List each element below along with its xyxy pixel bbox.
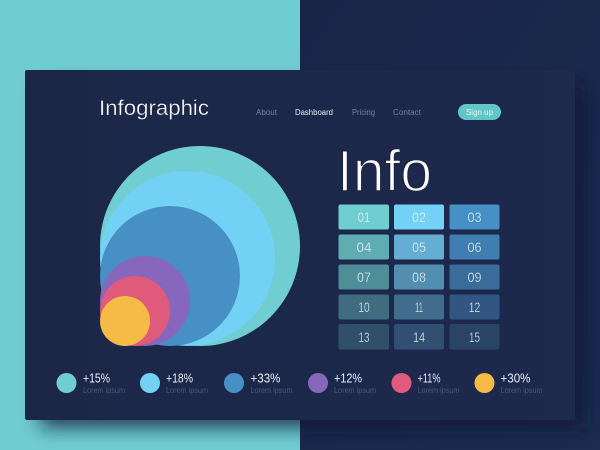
tile grid: 04 (356, 239, 372, 255)
tile grid (338, 204, 500, 350)
navigation menu: Dashboard (295, 108, 333, 117)
legend item 2: +18% (166, 372, 193, 386)
legend item 3 (224, 372, 293, 395)
tile grid: 10 (358, 299, 370, 315)
tile grid: 03 (468, 209, 482, 225)
legend item 6 (474, 372, 543, 395)
legend item 4: Lorem ipsum (334, 386, 376, 395)
legend item 5 (392, 372, 460, 395)
sign up button: Sign up (466, 108, 494, 117)
card shadow (40, 84, 585, 428)
tile grid: 15 (469, 329, 480, 345)
tile grid: 11 (415, 299, 423, 315)
title: Infographic (99, 96, 209, 120)
main card (25, 70, 575, 420)
navigation menu: About (256, 108, 278, 117)
tile grid: 01 (358, 209, 370, 225)
legend item 1 (56, 372, 125, 395)
legend item 5: Lorem ipsum (418, 386, 460, 395)
legend item 1: +15% (83, 372, 110, 386)
legend item 2: Lorem ipsum (166, 386, 208, 395)
nested circle chart (100, 146, 300, 346)
legend item 3: Lorem ipsum (250, 386, 293, 395)
tile grid: 08 (412, 269, 426, 285)
legend item 2 (140, 372, 208, 395)
tile grid: 02 (412, 209, 426, 225)
sign up button (458, 104, 501, 120)
tile grid: 07 (357, 269, 371, 285)
legend item 4: +12% (334, 372, 362, 386)
tile grid: 12 (469, 299, 480, 315)
legend item 6: Lorem ipsum (500, 386, 543, 395)
background: navy panel (300, 0, 600, 450)
legend item 1: Lorem ipsum (83, 386, 125, 395)
navigation menu: Contact (393, 108, 422, 117)
background: teal panel (0, 0, 300, 450)
navigation menu: Pricing (352, 108, 375, 117)
legend item 5: +11% (418, 372, 440, 386)
navigation menu (256, 108, 422, 117)
tile grid: 14 (413, 329, 425, 345)
tile grid: 06 (468, 239, 482, 255)
tile grid: 13 (358, 329, 370, 345)
tile grid: 09 (468, 269, 482, 285)
tile grid: 05 (412, 239, 426, 255)
legend item 4 (308, 372, 376, 395)
info heading: Info (337, 139, 432, 204)
legend item 3: +33% (250, 372, 280, 386)
legend item 6: +30% (500, 372, 530, 386)
